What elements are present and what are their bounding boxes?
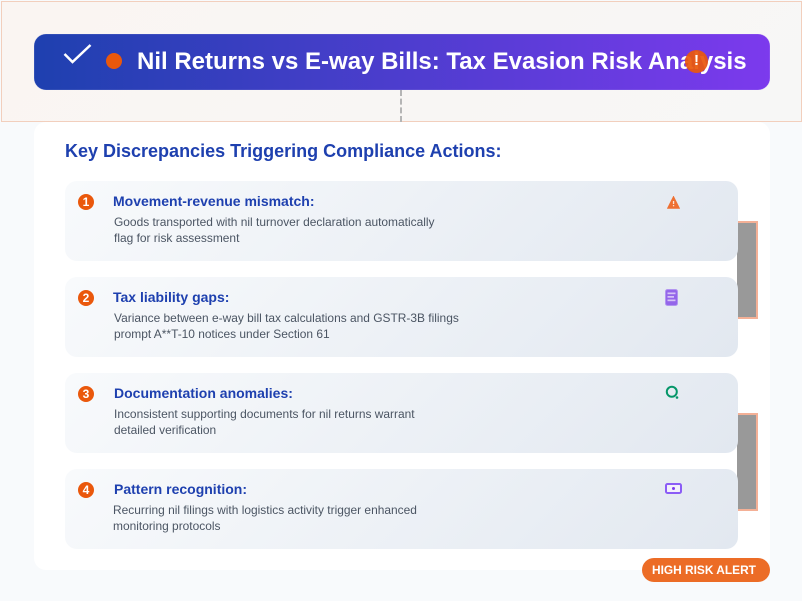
badge 1 xyxy=(78,194,94,210)
side bar: lower xyxy=(737,413,758,511)
badge 1: 1 xyxy=(83,195,89,209)
icon: document xyxy=(665,289,678,306)
card 3 text xyxy=(114,407,415,437)
card 1 text xyxy=(114,215,434,245)
card 2 heading: Tax liability gaps: xyxy=(113,289,229,305)
card 4 text: monitoring protocols xyxy=(113,519,220,533)
card 1 text: flag for risk assessment xyxy=(114,231,239,245)
card 3 heading: Documentation anomalies: xyxy=(114,385,293,401)
icon: orange dot xyxy=(106,53,122,69)
card 1 xyxy=(65,181,738,261)
badge 4 xyxy=(78,482,94,498)
title: Nil Returns vs E-way Bills: Tax Evasion Risk Analysis xyxy=(137,48,747,75)
card 3 text: Inconsistent supporting documents for nil returns warrant xyxy=(114,407,415,421)
card 2 text: prompt A**T-10 notices under Section 61 xyxy=(114,327,330,341)
card 2 xyxy=(65,277,738,357)
callout: high risk alert: HIGH RISK ALERT xyxy=(652,563,756,577)
card 3 text: detailed verification xyxy=(114,423,216,437)
card 2 text: Variance between e-way bill tax calculations and GSTR-3B filings xyxy=(114,311,459,325)
badge 3: 3 xyxy=(83,387,89,401)
card 4 xyxy=(65,469,738,549)
card 4 heading: Pattern recognition: xyxy=(114,481,247,497)
badge 3 xyxy=(78,386,94,402)
title banner xyxy=(34,34,770,90)
icon: exclamation badge: ! xyxy=(694,52,699,69)
callout: high risk alert xyxy=(642,558,770,582)
badge 4: 4 xyxy=(83,483,89,497)
icon: warning xyxy=(667,196,680,209)
icon: exclamation badge xyxy=(685,50,708,73)
badge 2: 2 xyxy=(83,291,89,305)
icon: check mark xyxy=(64,44,92,64)
card 4 text: Recurring nil filings with logistics activity trigger enhanced xyxy=(113,503,417,517)
card 1 text: Goods transported with nil turnover declaration automatically xyxy=(114,215,434,229)
header band xyxy=(1,1,802,122)
side bar: upper xyxy=(737,221,758,319)
card 2 text xyxy=(114,311,459,341)
card 3 xyxy=(65,373,738,453)
card 1 heading: Movement-revenue mismatch: xyxy=(113,193,315,209)
panel: key discrepancies xyxy=(34,122,770,570)
icon: screen xyxy=(665,483,682,494)
heading: Key Discrepancies Triggering Compliance Actions: xyxy=(65,141,501,161)
connector: dashed line xyxy=(400,90,402,122)
badge 2 xyxy=(78,290,94,306)
card 4 text xyxy=(113,503,417,533)
icon: magnifier xyxy=(666,386,678,399)
